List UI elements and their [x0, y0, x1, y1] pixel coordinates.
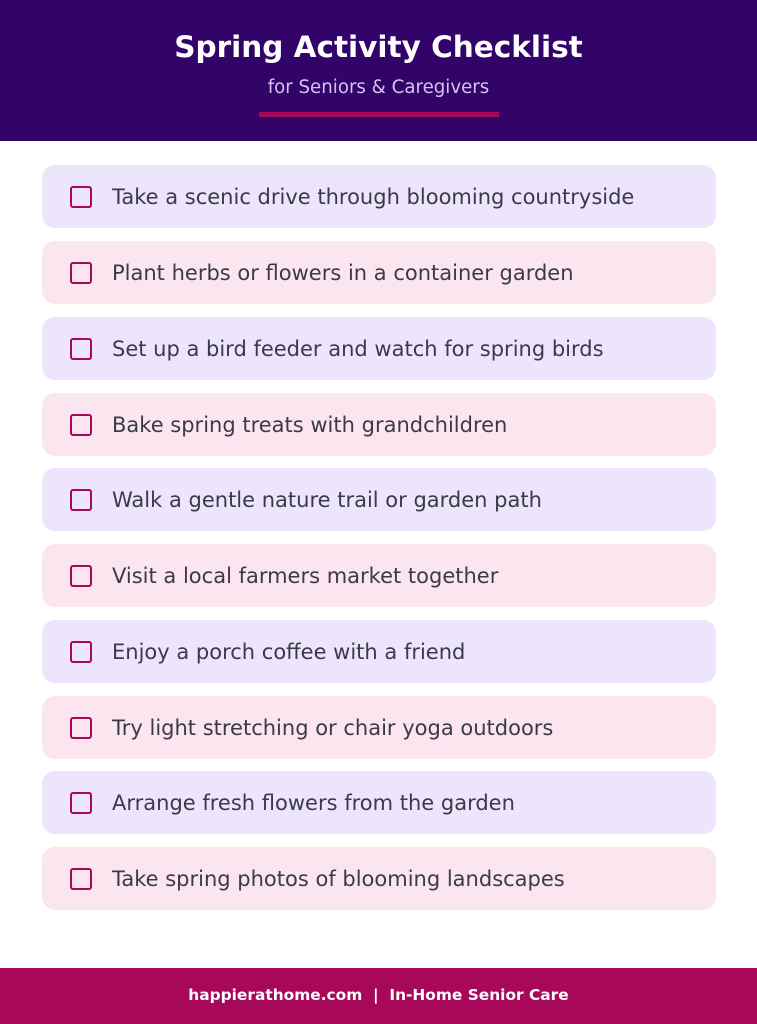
footer — [0, 968, 757, 1024]
checklist item 7 — [42, 620, 716, 683]
checklist item 4 — [42, 393, 716, 456]
subtitle: for Seniors & Caregivers — [268, 77, 489, 98]
checklist item 1 — [42, 165, 716, 228]
checklist item 2 — [42, 241, 716, 304]
accent underline — [259, 112, 499, 117]
checklist item 10: Take spring photos of blooming landscapes — [112, 867, 565, 891]
checklist item 6: Visit a local farmers market together — [112, 564, 498, 588]
checklist item 10 — [42, 847, 716, 910]
checklist item 4: Bake spring treats with grandchildren — [112, 413, 507, 437]
title: Spring Activity Checklist — [174, 30, 583, 64]
checklist item 9: Arrange fresh flowers from the garden — [112, 791, 515, 815]
checklist item 3: Set up a bird feeder and watch for spring birds — [112, 337, 604, 361]
checklist item 5: Walk a gentle nature trail or garden path — [112, 488, 542, 512]
checklist item 1: Take a scenic drive through blooming countryside — [112, 185, 634, 209]
checklist item 2: Plant herbs or flowers in a container garden — [112, 261, 574, 285]
checklist item 7: Enjoy a porch coffee with a friend — [112, 640, 465, 664]
checklist item 8: Try light stretching or chair yoga outdoors — [112, 716, 553, 740]
header banner — [0, 0, 757, 141]
checklist item 8 — [42, 696, 716, 759]
checklist item 3 — [42, 317, 716, 380]
footer: happierathome.com | In-Home Senior Care — [188, 986, 569, 1004]
checklist item 5 — [42, 468, 716, 531]
checklist item 9 — [42, 771, 716, 834]
checklist item 6 — [42, 544, 716, 607]
